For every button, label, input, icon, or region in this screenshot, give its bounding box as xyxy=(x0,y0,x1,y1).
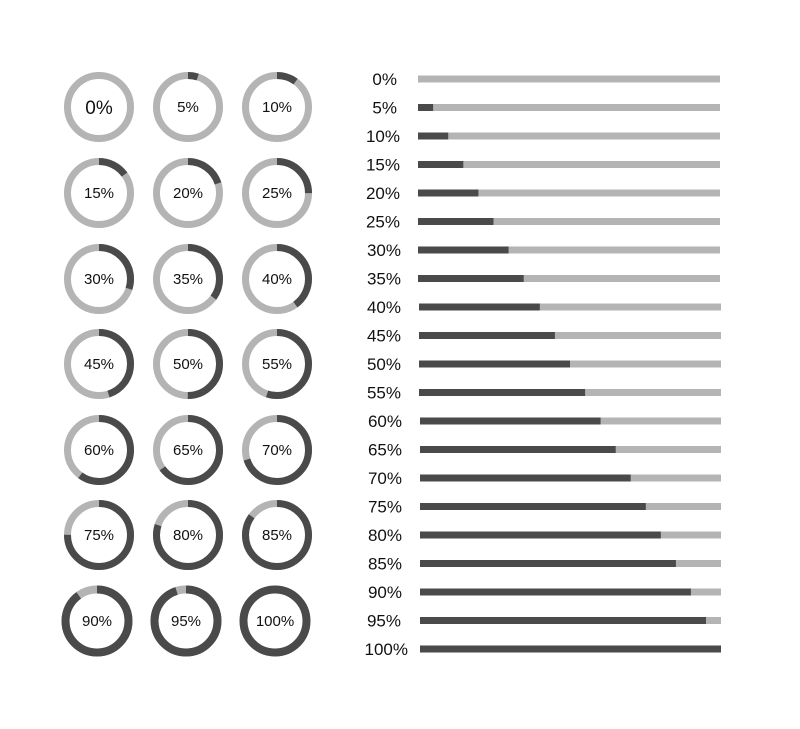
bar 45% xyxy=(367,326,721,346)
circle 60%: 60% xyxy=(84,442,114,459)
circle 40% xyxy=(246,248,308,310)
bar 30%: 30% xyxy=(367,241,401,260)
panel: bar progress indicators xyxy=(365,70,721,659)
circle 20%: 20% xyxy=(173,185,203,202)
circle 30% xyxy=(68,248,130,310)
circle 5%: 5% xyxy=(177,99,199,116)
circle 85% xyxy=(246,504,308,566)
circle 25%: 25% xyxy=(262,185,292,202)
bar 50%: 50% xyxy=(367,355,401,374)
bar 45%: 45% xyxy=(367,326,401,346)
bar 55% xyxy=(367,384,721,402)
bar 40%: 40% xyxy=(367,298,401,317)
bar 85% xyxy=(368,554,721,574)
circle 15%: 15% xyxy=(84,185,114,202)
bar 80% xyxy=(368,526,721,545)
circle 85%: 85% xyxy=(262,527,292,544)
circle 75% xyxy=(68,504,130,566)
circle 70%: 70% xyxy=(262,442,292,459)
bar 20%: 20% xyxy=(366,184,400,203)
circle 100%: 100% xyxy=(256,613,294,630)
circle 95%: 95% xyxy=(171,613,201,630)
bar 15% xyxy=(366,156,720,174)
circle 20% xyxy=(156,162,220,224)
circle 0% xyxy=(68,76,130,138)
bar 65% xyxy=(368,440,721,460)
bar 10%: 10% xyxy=(366,127,400,146)
bar 35% xyxy=(367,270,720,288)
circle 80% xyxy=(156,504,220,566)
bar 85%: 85% xyxy=(368,554,402,574)
circle 55% xyxy=(246,332,308,396)
circle 90% xyxy=(66,590,128,652)
circle 45% xyxy=(68,332,130,396)
bar 5%: 5% xyxy=(372,98,397,118)
circle 40%: 40% xyxy=(262,271,292,288)
bar 35%: 35% xyxy=(367,270,401,288)
bar 20% xyxy=(366,184,720,203)
circle 35% xyxy=(156,248,220,310)
bar 0%: 0% xyxy=(372,70,397,89)
bar 65%: 65% xyxy=(368,440,402,460)
panel: circle progress indicators xyxy=(66,76,308,652)
bar 80%: 80% xyxy=(368,526,402,545)
bar 100% xyxy=(365,640,721,659)
circle 65%: 65% xyxy=(173,442,203,459)
bar 50% xyxy=(367,355,721,374)
bar 60% xyxy=(368,412,721,431)
circle 15% xyxy=(68,162,130,224)
bar 60%: 60% xyxy=(368,412,402,431)
bar 10% xyxy=(366,127,720,146)
bar 0% xyxy=(372,70,720,89)
circle 75%: 75% xyxy=(84,527,114,544)
circle 0%: 0% xyxy=(85,98,113,119)
circle 80%: 80% xyxy=(173,527,203,544)
bar 90%: 90% xyxy=(368,583,402,602)
bar 15%: 15% xyxy=(366,156,400,174)
bar 5% xyxy=(372,98,720,118)
circle 25% xyxy=(246,162,308,224)
circle 45%: 45% xyxy=(84,356,114,373)
bar 95%: 95% xyxy=(367,612,401,630)
circle 55%: 55% xyxy=(262,356,292,373)
circle 50% xyxy=(156,332,220,396)
circle 65% xyxy=(156,418,220,482)
bar 75% xyxy=(368,498,721,516)
circle 95% xyxy=(154,590,218,652)
circle 50%: 50% xyxy=(173,356,203,373)
bar 25%: 25% xyxy=(366,212,400,232)
bar 75%: 75% xyxy=(368,498,402,516)
circle 60% xyxy=(68,418,130,482)
bar 100%: 100% xyxy=(365,640,408,659)
circle 10% xyxy=(246,76,308,138)
bar 90% xyxy=(368,583,721,602)
bar 55%: 55% xyxy=(367,384,401,402)
bar 95% xyxy=(367,612,721,630)
circle 70% xyxy=(246,418,308,482)
bar 70%: 70% xyxy=(368,469,402,488)
circle 90%: 90% xyxy=(82,613,112,630)
bar 40% xyxy=(367,298,721,317)
circle 100% xyxy=(244,590,306,652)
bar 70% xyxy=(368,469,721,488)
bar 30% xyxy=(367,241,720,260)
circle 30%: 30% xyxy=(84,271,114,288)
bar 25% xyxy=(366,212,720,232)
circle 10%: 10% xyxy=(262,99,292,116)
circle 35%: 35% xyxy=(173,271,203,288)
circle 5% xyxy=(156,76,220,138)
